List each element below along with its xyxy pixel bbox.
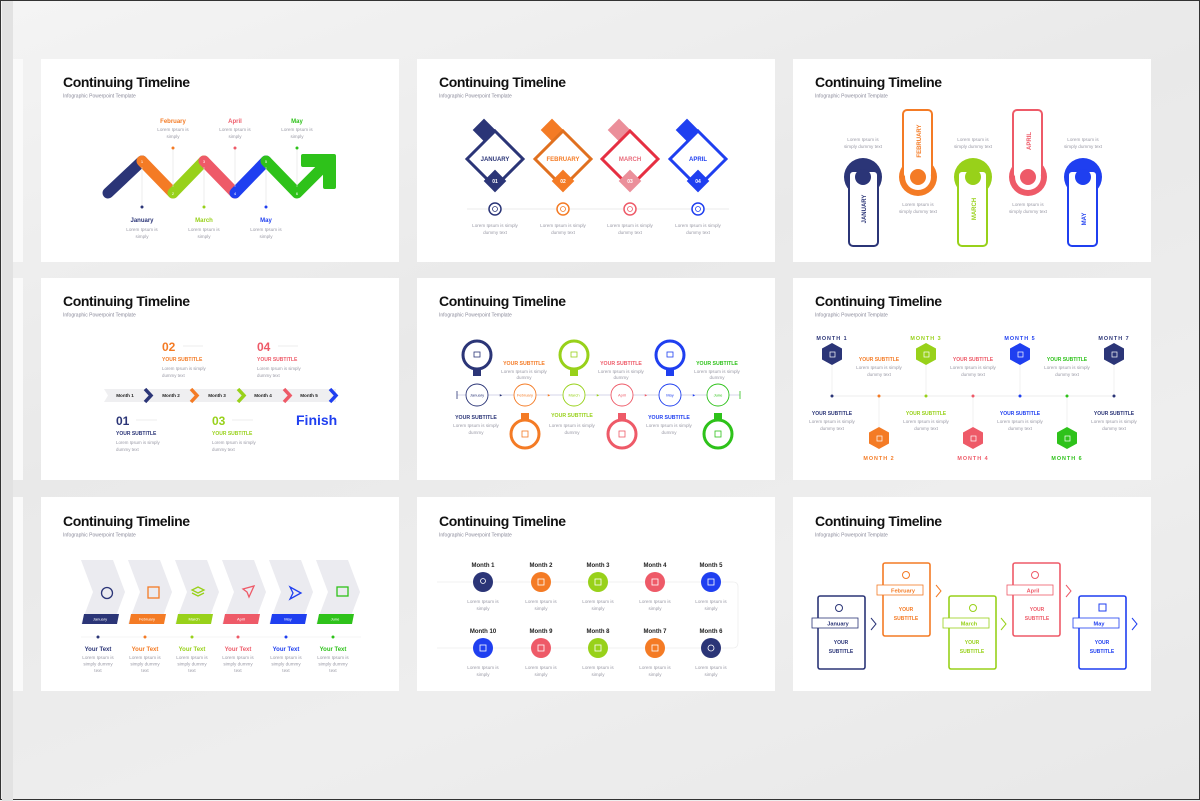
slide 5: circles on line timeline: ► xyxy=(499,392,503,398)
slide 8: ten month grid: Lorem Ipsum is xyxy=(582,599,614,604)
slide 5: circles on line timeline: YOUR SUBTITLE xyxy=(503,361,545,367)
slide 4: chevron month band xyxy=(41,278,399,480)
slide 4: chevron month band: Month 4 xyxy=(254,393,272,398)
slide 2: diamond timeline: dummy text xyxy=(551,230,576,235)
slide 1: zigzag arrow timeline: Lorem Ipsum is xyxy=(281,127,313,132)
slide 6: hexagon months timeline: dummy text xyxy=(914,426,939,431)
slide 7: chevron cards timeline: Lorem Ipsum is xyxy=(317,655,349,660)
slide 4: chevron month band: dummy text xyxy=(212,447,235,452)
slide 6: hexagon months timeline: dummy text xyxy=(1055,372,1080,377)
slide 6: hexagon months timeline: MONTH 6 xyxy=(1051,456,1083,462)
slide 5: circles on line timeline: Continuing Timeline xyxy=(439,293,566,309)
slide 6: hexagon months timeline: YOUR SUBTITLE xyxy=(812,411,853,417)
slide 1: zigzag arrow timeline: Lorem Ipsum is xyxy=(157,127,189,132)
slide 3: pill timeline: MAY xyxy=(1082,213,1088,225)
slide 6: hexagon months timeline: Lorem Ipsum is simply xyxy=(997,419,1044,424)
slide 5: circles on line timeline: dummy xyxy=(516,375,532,380)
slide 4: chevron month band: 01 xyxy=(116,414,130,428)
slide 8: ten month grid: Month 6 xyxy=(700,629,723,635)
slide 4: chevron month band: dummy text xyxy=(116,447,139,452)
slide 1: zigzag arrow timeline: Lorem Ipsum is xyxy=(126,227,158,232)
slide 2: diamond timeline: dummy text xyxy=(686,230,711,235)
slide 5: circles on line timeline: YOUR SUBTITLE xyxy=(600,361,642,367)
slide 9: card boxes timeline: SUBTITLE xyxy=(1025,616,1050,622)
slide 6: hexagon months timeline: Lorem Ipsum is simply xyxy=(903,419,950,424)
slide 3: pill timeline: MARCH xyxy=(972,198,978,220)
slide 8: ten month grid: simply xyxy=(476,672,490,677)
slide 6: hexagon months timeline: dummy text xyxy=(961,372,986,377)
slide 3: pill timeline: JANUARY xyxy=(862,195,868,223)
slide 5: circles on line timeline: YOUR SUBTITLE xyxy=(455,415,497,421)
slide 1: zigzag arrow timeline: 2 xyxy=(172,191,175,196)
slide 2: diamond timeline: Lorem Ipsum is simply xyxy=(540,223,587,228)
slide 1: zigzag arrow timeline: April xyxy=(228,119,242,125)
slide 8: ten month grid: Lorem Ipsum is xyxy=(467,665,499,670)
slide 9: card boxes timeline: April xyxy=(1027,588,1040,594)
slide 2: diamond timeline xyxy=(417,59,775,262)
slide 7: chevron cards timeline: simply dummy xyxy=(177,662,207,666)
slide 7: chevron cards timeline: text xyxy=(188,668,196,673)
slide 7: chevron cards timeline: Your Text xyxy=(132,647,158,653)
slide 5: circles on line timeline: ► xyxy=(692,392,696,398)
slide 1: zigzag arrow timeline: simply xyxy=(135,234,149,239)
slide 7: chevron cards timeline: simply dummy xyxy=(223,662,253,666)
slide 1: zigzag arrow timeline: simply xyxy=(290,134,304,139)
slide 2: diamond timeline: dummy text xyxy=(618,230,643,235)
slide 6: hexagon months timeline: MONTH 2 xyxy=(863,456,895,462)
slide 2: diamond timeline: Infographic Powerpoint Template xyxy=(439,94,512,100)
slide 6: hexagon months timeline: Lorem Ipsum is simply xyxy=(950,365,997,370)
slide 7: chevron cards timeline: January xyxy=(93,616,107,622)
slide 8: ten month grid: simply xyxy=(704,672,718,677)
slide 3: pill timeline: simply dummy text xyxy=(844,144,883,149)
slide 6: hexagon months timeline: Lorem Ipsum is simply xyxy=(1044,365,1091,370)
slide 3: pill timeline: FEBRUARY xyxy=(917,124,923,158)
slide 6: hexagon months timeline: MONTH 3 xyxy=(910,336,942,342)
slide 1: zigzag arrow timeline: 1 xyxy=(141,159,144,164)
slide 1: zigzag arrow timeline: simply xyxy=(197,234,211,239)
slide 3: pill timeline: Lorem Ipsum is xyxy=(902,202,934,207)
slide 8: ten month grid: Month 5 xyxy=(700,563,723,569)
slide 6: hexagon months timeline: Lorem Ipsum is simply xyxy=(809,419,856,424)
slide 9: card boxes timeline: Continuing Timeline xyxy=(815,513,942,529)
slide 7: chevron cards timeline: Your Text xyxy=(320,647,346,653)
slide 9: card boxes timeline: SUBTITLE xyxy=(960,649,985,655)
slide 8: ten month grid: simply xyxy=(591,606,605,611)
slide 2: diamond timeline: 01 xyxy=(492,179,498,185)
slide 7: chevron cards timeline: text xyxy=(282,668,290,673)
slide 2: diamond timeline: dummy text xyxy=(483,230,508,235)
slide 6: hexagon months timeline: MONTH 1 xyxy=(816,336,848,342)
slide 7: chevron cards timeline: May xyxy=(284,616,292,622)
slide 9: card boxes timeline xyxy=(793,497,1151,691)
slide 5: circles on line timeline xyxy=(417,278,775,480)
slide 8: ten month grid xyxy=(417,497,775,691)
slide 5: circles on line timeline: June xyxy=(714,392,723,398)
slide 8: ten month grid: Month 1 xyxy=(472,563,495,569)
slide 3: pill timeline: Lorem Ipsum is xyxy=(1012,202,1044,207)
slide 5: circles on line timeline: Infographic Powerpoint Template xyxy=(439,312,512,318)
slide 5: circles on line timeline: Lorem Ipsum is simply xyxy=(694,369,741,374)
slide 6: hexagon months timeline: dummy text xyxy=(1008,426,1033,431)
slide 4: chevron month band: dummy text xyxy=(257,373,280,378)
slide 3: pill timeline: Lorem Ipsum is xyxy=(847,137,879,142)
slide 9: card boxes timeline: Infographic Powerpoint Template xyxy=(815,532,888,538)
partial slide left row1 xyxy=(13,59,23,262)
slide 7: chevron cards timeline: Your Text xyxy=(85,647,111,653)
slide 2: diamond timeline: MARCH xyxy=(619,157,641,163)
slide 5: circles on line timeline: YOUR SUBTITLE xyxy=(551,413,593,419)
slide 9: card boxes timeline: YOUR xyxy=(899,607,914,613)
slide 4: chevron month band: Month 5 xyxy=(300,393,318,398)
slide 6: hexagon months timeline: YOUR SUBTITLE xyxy=(859,357,900,363)
slide 6: hexagon months timeline: Lorem Ipsum is simply xyxy=(856,365,903,370)
slide 2: diamond timeline: JANUARY xyxy=(481,157,509,163)
slide 6: hexagon months timeline: YOUR SUBTITLE xyxy=(1047,357,1088,363)
slide 5: circles on line timeline: ► xyxy=(547,392,551,398)
slide 9: card boxes timeline: January xyxy=(827,622,850,628)
slide 7: chevron cards timeline: Continuing Timeline xyxy=(63,513,190,529)
slide 5: circles on line timeline: YOUR SUBTITLE xyxy=(696,361,738,367)
slide 4: chevron month band: YOUR SUBTITLE xyxy=(162,357,203,363)
slide 6: hexagon months timeline: YOUR SUBTITLE xyxy=(1000,411,1041,417)
slide 1: zigzag arrow timeline: Lorem Ipsum is xyxy=(250,227,282,232)
partial slide left row3 xyxy=(13,497,23,691)
slide 6: hexagon months timeline: dummy text xyxy=(820,426,845,431)
slide 4: chevron month band: 02 xyxy=(162,340,176,354)
slide 7: chevron cards timeline: Infographic Powerpoint Template xyxy=(63,532,136,538)
slide 9: card boxes timeline: February xyxy=(891,588,916,594)
slide 9: card boxes timeline: May xyxy=(1094,622,1105,628)
slide 5: circles on line timeline: Lorem Ipsum is simply xyxy=(598,369,645,374)
slide 1: zigzag arrow timeline: May xyxy=(260,218,272,224)
slide 5: circles on line timeline: dummy xyxy=(613,375,629,380)
slide 5: circles on line timeline: ► xyxy=(596,392,600,398)
slide 2: diamond timeline: Lorem Ipsum is simply xyxy=(607,223,654,228)
slide 4: chevron month band: Infographic Powerpoint Template xyxy=(63,312,136,318)
slide 3: pill timeline: Infographic Powerpoint Template xyxy=(815,94,888,100)
slide 7: chevron cards timeline: Lorem Ipsum is xyxy=(176,655,208,660)
slide 9: card boxes timeline: SUBTITLE xyxy=(1090,649,1115,655)
slide 7: chevron cards timeline: simply dummy xyxy=(271,662,301,666)
slide 2: diamond timeline: 02 xyxy=(560,179,566,185)
slide 1: zigzag arrow timeline: Continuing Timeline xyxy=(63,74,190,90)
slide 1: zigzag arrow timeline xyxy=(41,59,399,262)
slide 1: zigzag arrow timeline: 5 xyxy=(265,159,268,164)
slide 6: hexagon months timeline: dummy text xyxy=(867,372,892,377)
slide 6: hexagon months timeline: Infographic Powerpoint Template xyxy=(815,312,888,318)
slide 5: circles on line timeline: Lorem Ipsum is simply xyxy=(646,423,693,428)
slide 8: ten month grid: Lorem Ipsum is xyxy=(639,665,671,670)
slide 8: ten month grid: simply xyxy=(476,606,490,611)
slide 7: chevron cards timeline: Lorem Ipsum is xyxy=(270,655,302,660)
slide 5: circles on line timeline: Lorem Ipsum is simply xyxy=(453,423,500,428)
slide 6: hexagon months timeline: dummy text xyxy=(1102,426,1127,431)
slide 4: chevron month band: dummy text xyxy=(162,373,185,378)
slide 3: pill timeline: simply dummy text xyxy=(1064,144,1103,149)
slide 6: hexagon months timeline: YOUR SUBTITLE xyxy=(1094,411,1135,417)
slide 3: pill timeline: Lorem Ipsum is xyxy=(957,137,989,142)
slide 3: pill timeline: simply dummy text xyxy=(899,209,938,214)
slide 8: ten month grid: Month 4 xyxy=(644,563,667,569)
slide 7: chevron cards timeline: text xyxy=(329,668,337,673)
slide 3: pill timeline: Continuing Timeline xyxy=(815,74,942,90)
slide 7: chevron cards timeline: simply dummy xyxy=(318,662,348,666)
slide 6: hexagon months timeline: YOUR SUBTITLE xyxy=(906,411,947,417)
slide 1: zigzag arrow timeline: simply xyxy=(259,234,273,239)
slide 7: chevron cards timeline xyxy=(41,497,399,691)
slide 9: card boxes timeline: YOUR xyxy=(965,640,980,646)
slide 8: ten month grid: Lorem Ipsum is xyxy=(467,599,499,604)
slide 1: zigzag arrow timeline: May xyxy=(291,119,303,125)
slide 8: ten month grid: Lorem Ipsum is xyxy=(525,599,557,604)
slide 8: ten month grid: Infographic Powerpoint Template xyxy=(439,532,512,538)
slide 3: pill timeline xyxy=(793,59,1151,262)
slide 7: chevron cards timeline: simply dummy xyxy=(130,662,160,666)
slide 2: diamond timeline: 03 xyxy=(627,179,633,185)
slide 6: hexagon months timeline: MONTH 5 xyxy=(1004,336,1036,342)
slide 7: chevron cards timeline: February xyxy=(139,616,155,622)
slide 1: zigzag arrow timeline: Lorem Ipsum is xyxy=(188,227,220,232)
slide 3: pill timeline: APRIL xyxy=(1027,132,1033,150)
slide 4: chevron month band: Lorem Ipsum is simply xyxy=(162,366,206,371)
slide 4: chevron month band: 04 xyxy=(257,340,271,354)
slide 1: zigzag arrow timeline: March xyxy=(195,218,213,224)
slide 4: chevron month band: YOUR SUBTITLE xyxy=(257,357,298,363)
slide 8: ten month grid: Continuing Timeline xyxy=(439,513,566,529)
slide 7: chevron cards timeline: June xyxy=(331,616,340,622)
slide 5: circles on line timeline: YOUR SUBTITLE xyxy=(648,415,690,421)
partial slide left row2 xyxy=(13,278,23,480)
slide 6: hexagon months timeline: Lorem Ipsum is simply xyxy=(1091,419,1138,424)
slide 5: circles on line timeline: May xyxy=(666,392,674,398)
slide 7: chevron cards timeline: March xyxy=(188,616,200,622)
slide 1: zigzag arrow timeline: simply xyxy=(166,134,180,139)
slide 8: ten month grid: simply xyxy=(648,606,662,611)
slide 8: ten month grid: Lorem Ipsum is xyxy=(695,665,727,670)
slide 7: chevron cards timeline: Your Text xyxy=(179,647,205,653)
slide 9: card boxes timeline: SUBTITLE xyxy=(829,649,854,655)
slide 1: zigzag arrow timeline: Lorem Ipsum is xyxy=(219,127,251,132)
slide 1: zigzag arrow timeline: January xyxy=(130,218,154,224)
slide 4: chevron month band: Month 1 xyxy=(116,393,134,398)
slide 7: chevron cards timeline: Your Text xyxy=(273,647,299,653)
slide 6: hexagon months timeline: YOUR SUBTITLE xyxy=(953,357,994,363)
slide 7: chevron cards timeline: Lorem Ipsum is xyxy=(222,655,254,660)
slide 9: card boxes timeline: YOUR xyxy=(1030,607,1045,613)
slide 6: hexagon months timeline: MONTH 7 xyxy=(1098,336,1130,342)
slide 1: zigzag arrow timeline: 4 xyxy=(234,191,237,196)
slide 4: chevron month band: YOUR SUBTITLE xyxy=(116,431,157,437)
slide 4: chevron month band: Finish xyxy=(296,412,337,428)
slide 7: chevron cards timeline: text xyxy=(141,668,149,673)
slide 8: ten month grid: simply xyxy=(591,672,605,677)
slide 2: diamond timeline: APRIL xyxy=(689,157,707,163)
slide 5: circles on line timeline: ► xyxy=(644,392,648,398)
slide 7: chevron cards timeline: Your Text xyxy=(225,647,251,653)
slide 5: circles on line timeline: March xyxy=(568,392,580,398)
slide 2: diamond timeline: Lorem Ipsum is simply xyxy=(472,223,519,228)
slide 7: chevron cards timeline: text xyxy=(94,668,102,673)
slide 5: circles on line timeline: dummy xyxy=(468,430,484,435)
slide 8: ten month grid: simply xyxy=(648,672,662,677)
slide 8: ten month grid: Month 2 xyxy=(530,563,553,569)
slide 2: diamond timeline: Continuing Timeline xyxy=(439,74,566,90)
slide 5: circles on line timeline: dummy xyxy=(661,430,677,435)
slide 8: ten month grid: simply xyxy=(534,672,548,677)
slide 1: zigzag arrow timeline: 3 xyxy=(203,159,206,164)
slide 5: circles on line timeline: Lorem Ipsum is simply xyxy=(501,369,548,374)
slide 3: pill timeline: simply dummy text xyxy=(1009,209,1048,214)
slide 4: chevron month band: Lorem Ipsum is simply xyxy=(212,440,256,445)
slide 1: zigzag arrow timeline: simply xyxy=(228,134,242,139)
slide 8: ten month grid: Month 8 xyxy=(586,629,610,635)
slide 7: chevron cards timeline: April xyxy=(237,616,245,622)
slide 9: card boxes timeline: SUBTITLE xyxy=(894,616,919,622)
slide 4: chevron month band: YOUR SUBTITLE xyxy=(212,431,253,437)
slide 9: card boxes timeline: YOUR xyxy=(1095,640,1110,646)
slide 4: chevron month band: Lorem Ipsum is simply xyxy=(116,440,160,445)
slide 5: circles on line timeline: April xyxy=(618,392,626,398)
slide 8: ten month grid: Month 7 xyxy=(644,629,667,635)
slide 3: pill timeline: simply dummy text xyxy=(954,144,993,149)
slide 1: zigzag arrow timeline: 6 xyxy=(296,191,299,196)
slide 5: circles on line timeline: February xyxy=(517,392,533,398)
slide 2: diamond timeline: FEBRUARY xyxy=(546,157,580,163)
slide 5: circles on line timeline: January xyxy=(470,392,484,398)
slide 2: diamond timeline: 04 xyxy=(695,179,701,185)
slide 6: hexagon months timeline: Continuing Timeline xyxy=(815,293,942,309)
slide 8: ten month grid: Lorem Ipsum is xyxy=(582,665,614,670)
slide 7: chevron cards timeline: simply dummy xyxy=(83,662,113,666)
slide 2: diamond timeline: Lorem Ipsum is simply xyxy=(675,223,722,228)
slide 8: ten month grid: simply xyxy=(534,606,548,611)
slide 6: hexagon months timeline: MONTH 4 xyxy=(957,456,989,462)
slide 1: zigzag arrow timeline: Infographic Powerpoint Template xyxy=(63,94,136,100)
slide 8: ten month grid: Month 10 xyxy=(470,629,497,635)
slide 7: chevron cards timeline: text xyxy=(234,668,242,673)
slide 3: pill timeline: Lorem Ipsum is xyxy=(1067,137,1099,142)
slide 9: card boxes timeline: YOUR xyxy=(834,640,849,646)
slide 4: chevron month band: Continuing Timeline xyxy=(63,293,190,309)
slide 7: chevron cards timeline: Lorem Ipsum is xyxy=(82,655,114,660)
slide 8: ten month grid: Lorem Ipsum is xyxy=(525,665,557,670)
slide 5: circles on line timeline: dummy xyxy=(564,430,580,435)
slide 6: hexagon months timeline xyxy=(793,278,1151,480)
slide 7: chevron cards timeline: Lorem Ipsum is xyxy=(129,655,161,660)
slide 5: circles on line timeline: dummy xyxy=(709,375,725,380)
slide 8: ten month grid: Lorem Ipsum is xyxy=(639,599,671,604)
slide 5: circles on line timeline: Lorem Ipsum is simply xyxy=(549,423,596,428)
slide 8: ten month grid: simply xyxy=(704,606,718,611)
slide 1: zigzag arrow timeline: February xyxy=(160,119,186,125)
slide 4: chevron month band: 03 xyxy=(212,414,226,428)
slide 8: ten month grid: Month 3 xyxy=(586,563,610,569)
slide 4: chevron month band: Month 2 xyxy=(162,393,180,398)
slide 8: ten month grid: Lorem Ipsum is xyxy=(695,599,727,604)
slide 8: ten month grid: Month 9 xyxy=(530,629,553,635)
slide 4: chevron month band: Month 3 xyxy=(208,393,226,398)
slide 4: chevron month band: Lorem Ipsum is simply xyxy=(257,366,301,371)
slide 9: card boxes timeline: March xyxy=(961,622,978,628)
